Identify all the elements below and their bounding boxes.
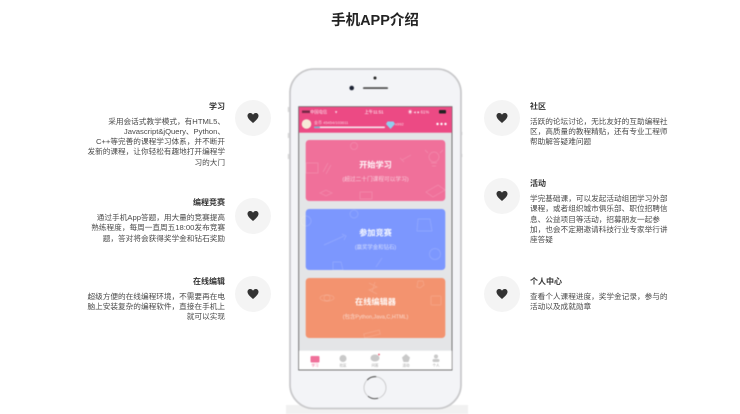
app header bbox=[299, 107, 452, 133]
card decoration bbox=[301, 210, 440, 270]
panel: community: 区，高质量的教程精贴，还有专业工程师 bbox=[530, 127, 668, 136]
status bar: ▾ bbox=[335, 110, 337, 114]
panel: contest: 通过手机App答题，用大量的竞赛提高 bbox=[97, 213, 225, 222]
card title: 参加竞赛 bbox=[359, 228, 392, 238]
panel: study: C++等完善的课程学习体系，并不断开 bbox=[96, 137, 225, 146]
home button bbox=[364, 377, 386, 399]
panel: contest: 题，答对将会获得奖学金和钻石奖励 bbox=[103, 234, 225, 242]
tab: profile bbox=[432, 354, 440, 368]
tab: community: 社区 bbox=[340, 362, 347, 368]
panel: profile: 查看个人课程进度，奖学金记录，参与的 bbox=[530, 292, 668, 300]
tab: community bbox=[340, 355, 347, 368]
panel: community bbox=[530, 102, 668, 146]
tab: questions: 问答 bbox=[372, 362, 379, 368]
panel: activity: 座答疑 bbox=[530, 235, 553, 244]
panel: online editor: 脑上安装复杂的编程软件，直接在手机上 bbox=[87, 302, 225, 311]
icon: heart profile bbox=[484, 276, 520, 312]
icon: heart contest bbox=[235, 198, 271, 234]
card subtitle: (超过二十门课程可以学习) bbox=[342, 175, 409, 183]
status bar: ◉ ◂ ● 61% bbox=[408, 108, 429, 116]
tab: activity bbox=[402, 354, 410, 368]
card title: 在线编辑器 bbox=[355, 296, 397, 306]
status bar: 中国电信 bbox=[310, 108, 328, 116]
card: online editor bbox=[306, 278, 445, 338]
panel: profile: 活动以及成就勋章 bbox=[530, 302, 591, 311]
title: 手机APP介绍 bbox=[331, 13, 419, 29]
panel: online editor: 超级方便的在线编程环境，不需要再在电 bbox=[87, 292, 225, 300]
progress bar bbox=[314, 126, 385, 128]
panel: activity: 加，也会不定期邀请科技行业专家举行讲 bbox=[530, 225, 668, 234]
panel: online editor bbox=[87, 276, 225, 321]
panel: activity: 学完基础课，可以发起活动组团学习外部 bbox=[530, 194, 668, 203]
card subtitle: (赢奖学金和钻石) bbox=[355, 243, 396, 251]
diamond count: x992 bbox=[395, 122, 404, 126]
panel: community: 社区 bbox=[530, 102, 546, 110]
status bar bbox=[302, 108, 446, 116]
panel: community: 活跃的论坛讨论，无比友好的互助编程社 bbox=[530, 116, 668, 126]
panel: contest: 编程竞赛 bbox=[193, 198, 225, 207]
menu dots bbox=[436, 123, 447, 125]
panel: activity: 课程，或者组织城市俱乐部、职位招聘信 bbox=[530, 204, 668, 213]
phone shadow bbox=[286, 405, 468, 414]
score label: 金币 45454/103611 bbox=[314, 119, 349, 125]
panel: activity bbox=[530, 179, 668, 244]
phone earpiece and camera bbox=[349, 76, 388, 90]
panel: study: 采用会话式教学模式，有HTML5、 bbox=[108, 116, 225, 126]
phone body bbox=[288, 69, 462, 408]
card subtitle: (包含Python,Java,C,HTML) bbox=[343, 312, 409, 320]
panel: study: 习的大门 bbox=[194, 158, 225, 166]
card title: 开始学习 bbox=[359, 160, 392, 170]
icon: heart activity bbox=[484, 178, 520, 214]
icon: heart editor bbox=[235, 276, 271, 312]
panel: study: Javascript&jQuery、Python、 bbox=[124, 127, 225, 136]
panel: study: 学习 bbox=[209, 102, 225, 110]
panel: study: 发新的课程，让你轻松有趣地打开编程学 bbox=[87, 147, 225, 156]
tab bar bbox=[299, 351, 452, 370]
panel: contest bbox=[91, 198, 225, 242]
avatar bbox=[302, 119, 311, 129]
diamond count bbox=[386, 122, 404, 129]
card: join contest bbox=[301, 209, 445, 270]
card decoration bbox=[320, 281, 441, 338]
panel: community: 帮助解答疑难问题 bbox=[530, 137, 591, 146]
panel: online editor: 在线编辑 bbox=[193, 276, 225, 286]
status bar: 上午11:51 bbox=[364, 108, 384, 116]
icon: heart study bbox=[235, 100, 271, 136]
panel: profile: 个人中心 bbox=[530, 276, 562, 286]
tab: activity: 活动 bbox=[402, 362, 410, 368]
panel: online editor: 就可以实现 bbox=[187, 312, 225, 321]
tab: profile: 个人 bbox=[432, 362, 440, 368]
tab: learn bbox=[310, 356, 320, 368]
tab: learn: 学习 bbox=[312, 362, 319, 368]
panel: contest: 熟练程度，每周一直周五18:00发布竞赛 bbox=[91, 223, 225, 232]
panel: profile bbox=[530, 276, 668, 311]
panel: activity: 活动 bbox=[530, 179, 546, 188]
panel: study bbox=[87, 102, 225, 166]
phone screen bbox=[299, 107, 452, 370]
card decoration bbox=[306, 142, 445, 199]
tab: questions bbox=[370, 354, 380, 368]
card: start learning bbox=[306, 140, 445, 201]
panel: activity: 息、公益项目等活动，招募朋友一起参 bbox=[530, 214, 660, 224]
icon: heart community bbox=[484, 100, 520, 136]
